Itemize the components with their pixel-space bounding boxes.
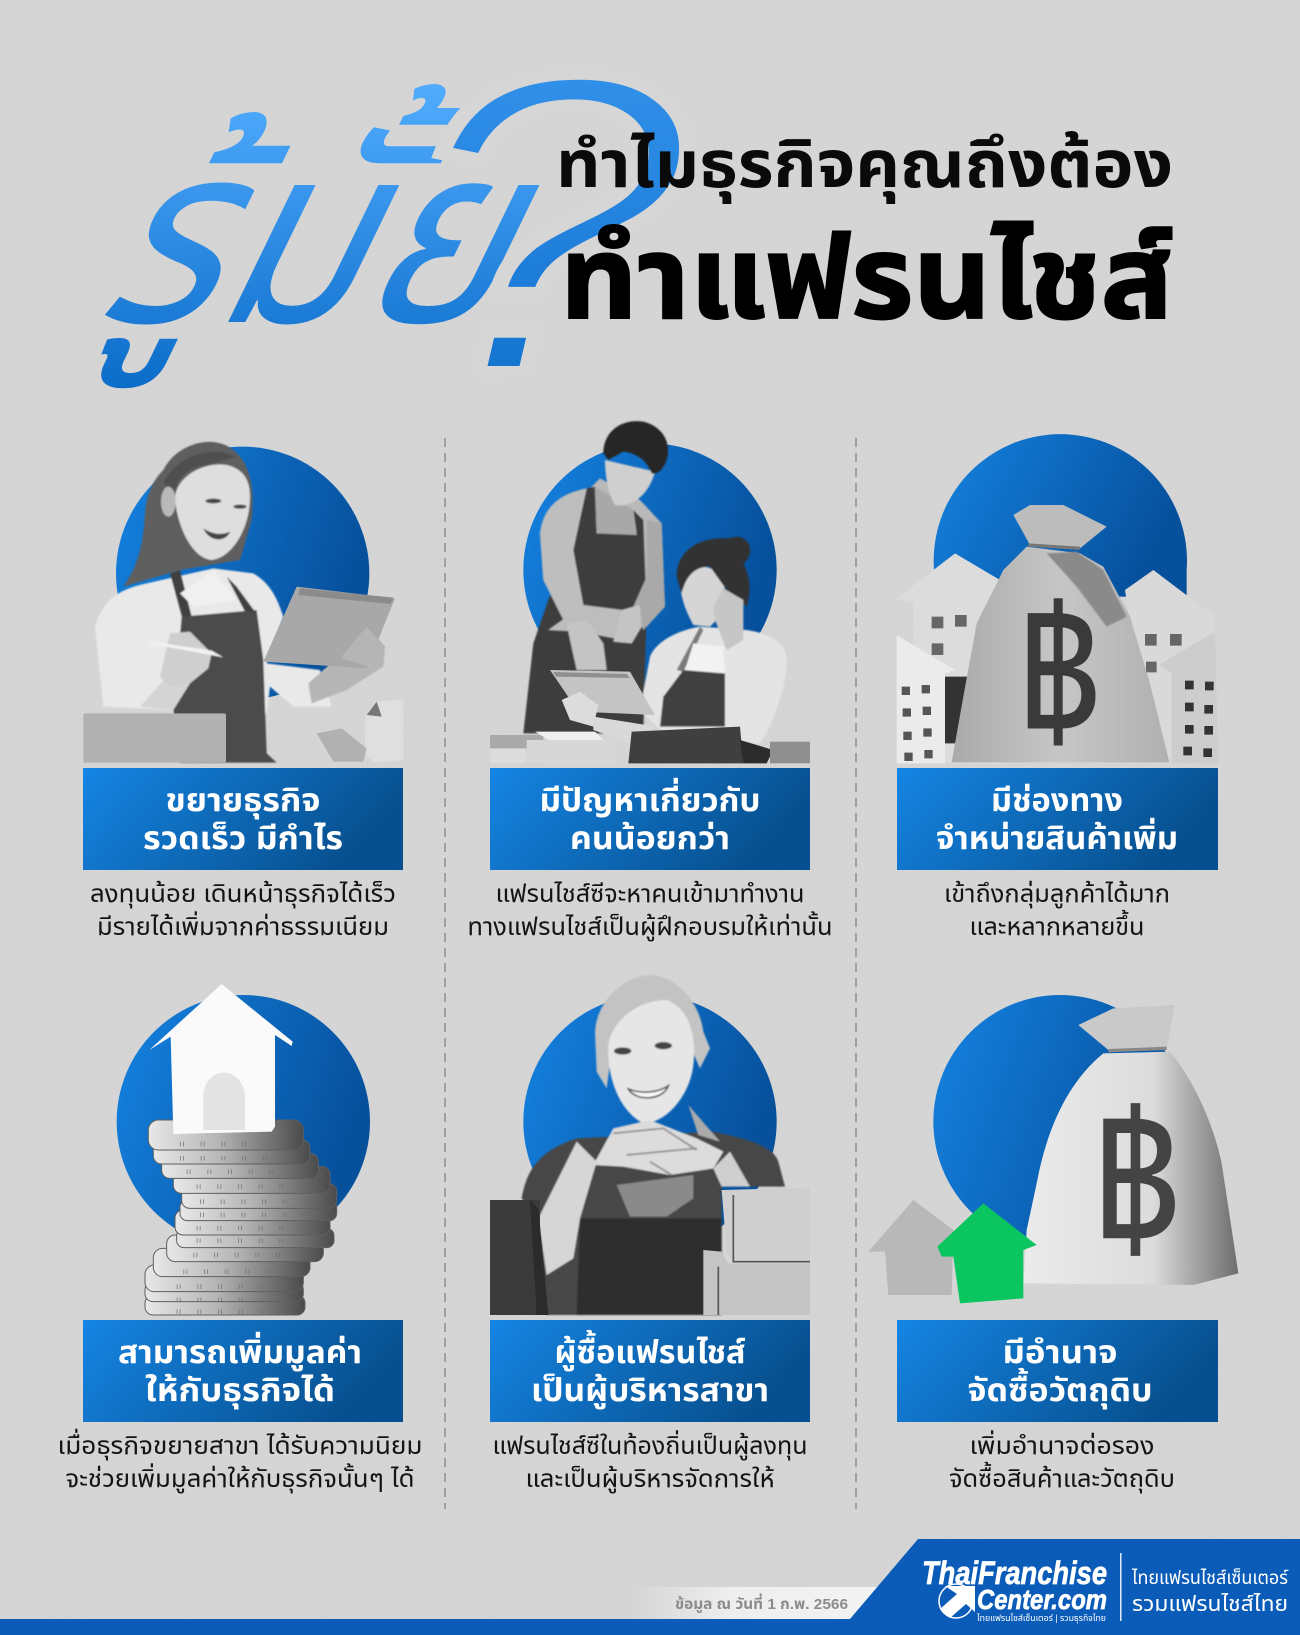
right slogan: รวมแฟรนไชส์ไทย bbox=[1132, 1593, 1288, 1616]
photo: house on coin stack bbox=[117, 984, 370, 1315]
logo arrow icon bbox=[939, 1584, 975, 1618]
photo: woman with tablet bbox=[83, 442, 403, 763]
baht sign: ฿ bbox=[1016, 573, 1103, 774]
box title: สามารถเพิ่มมูลค่า bbox=[118, 1331, 362, 1371]
description: ลงทุนน้อย เดินหน้าธุรกิจได้เร็ว bbox=[90, 880, 396, 909]
right slogan: ไทยแฟรนไชส์เซ็นเตอร์ bbox=[1131, 1568, 1289, 1589]
description: จะช่วยเพิ่มมูลค่าให้กับธุรกิจนั้นๆ ได้ bbox=[66, 1462, 414, 1494]
box title bbox=[968, 1334, 1152, 1409]
box title bbox=[936, 782, 1178, 856]
photo: money bag with green house bbox=[868, 995, 1238, 1303]
description: เข้าถึงกลุ่มลูกค้าได้มาก bbox=[944, 880, 1170, 909]
description: ทางแฟรนไชส์เป็นผู้ฝึกอบรมให้เท่านั้น bbox=[468, 910, 832, 942]
description bbox=[944, 880, 1170, 941]
logo tagline: ไทยแฟรนไชส์เซ็นเตอร์ | รวมธุรกิจไทย bbox=[976, 1613, 1106, 1623]
right slogan bbox=[1131, 1568, 1289, 1616]
description: จัดซื้อสินค้าและวัตถุดิบ bbox=[949, 1461, 1175, 1494]
description: และหลากหลายขึ้น bbox=[970, 909, 1144, 941]
blue title box bbox=[490, 1320, 810, 1422]
panel: purchasing power bbox=[868, 995, 1238, 1494]
photo: baht money bag with wooden houses bbox=[897, 434, 1218, 774]
description: มีรายได้เพิ่มจากค่าธรรมเนียม bbox=[97, 910, 389, 941]
box title bbox=[143, 782, 343, 856]
description: เมื่อธุรกิจขยายสาขา ได้รับความนิยม bbox=[58, 1428, 422, 1461]
box title bbox=[540, 777, 760, 856]
panel: franchisee as branch manager bbox=[490, 975, 810, 1494]
description: แฟรนไชส์ซีในท้องถิ่นเป็นผู้ลงทุน bbox=[492, 1429, 808, 1461]
footer bbox=[0, 1539, 1300, 1635]
divider bbox=[1120, 1553, 1122, 1621]
description bbox=[58, 1428, 422, 1494]
box title: รวดเร็ว มีกำไร bbox=[143, 820, 343, 856]
panel: more sales channels bbox=[897, 434, 1218, 941]
logo wordmark bbox=[922, 1555, 1107, 1615]
blue footer bar bbox=[0, 1539, 1300, 1635]
logo wordmark: Center.com bbox=[977, 1584, 1107, 1615]
source text: ข้อมูล ณ วันที่ 1 ก.พ. 2566 bbox=[675, 1593, 848, 1614]
heading: blue handwritten rumai bbox=[75, 0, 692, 464]
box title: ขยายธุรกิจ bbox=[166, 782, 320, 819]
blue title box bbox=[490, 768, 810, 870]
box title: ผู้ซื้อแฟรนไชส์ bbox=[554, 1329, 746, 1371]
source strip bbox=[630, 1587, 880, 1619]
description bbox=[90, 880, 396, 941]
blue title box bbox=[897, 1320, 1218, 1422]
heading: black two-line title bbox=[556, 127, 1173, 343]
heading: black two-line title: ทำแฟรนไชส์ bbox=[560, 213, 1173, 343]
box title: คนน้อยกว่า bbox=[570, 820, 730, 856]
column dividers bbox=[445, 438, 856, 1509]
panel: fewer staff problems bbox=[468, 421, 832, 942]
panel: increase business value bbox=[58, 984, 422, 1494]
panel: expand business bbox=[83, 442, 403, 941]
box title: เป็นผู้บริหารสาขา bbox=[531, 1372, 769, 1409]
box title: มีปัญหาเกี่ยวกับ bbox=[540, 777, 760, 818]
box title bbox=[118, 1331, 362, 1409]
box title: จัดซื้อวัตถุดิบ bbox=[968, 1367, 1152, 1409]
baht sign: ฿ bbox=[1091, 1076, 1182, 1285]
blue title box bbox=[897, 768, 1218, 870]
description bbox=[949, 1429, 1175, 1494]
description: เพิ่มอำนาจต่อรอง bbox=[970, 1429, 1154, 1460]
heading: blue handwritten rumai: รู้มั้ย bbox=[75, 82, 566, 388]
description bbox=[468, 880, 832, 942]
photo: man and woman with tablets bbox=[490, 421, 810, 763]
photo: smiling woman with hands clasped bbox=[490, 975, 810, 1315]
box title: ให้กับธุรกิจได้ bbox=[145, 1372, 335, 1409]
blue title box bbox=[83, 768, 403, 870]
description: แฟรนไชส์ซีจะหาคนเข้ามาทำงาน bbox=[496, 880, 804, 908]
description: และเป็นผู้บริหารจัดการให้ bbox=[526, 1465, 774, 1494]
description bbox=[492, 1429, 808, 1494]
box title: มีอำนาจ bbox=[1002, 1334, 1118, 1370]
box title bbox=[531, 1329, 769, 1409]
box title: มีช่องทาง bbox=[991, 782, 1123, 818]
box title: จำหน่ายสินค้าเพิ่ม bbox=[936, 817, 1178, 856]
heading: black two-line title: ทำไมธุรกิจคุณถึงต้อง bbox=[556, 127, 1173, 204]
blue title box bbox=[83, 1320, 403, 1422]
logo wordmark: ThaiFranchise bbox=[922, 1555, 1107, 1591]
